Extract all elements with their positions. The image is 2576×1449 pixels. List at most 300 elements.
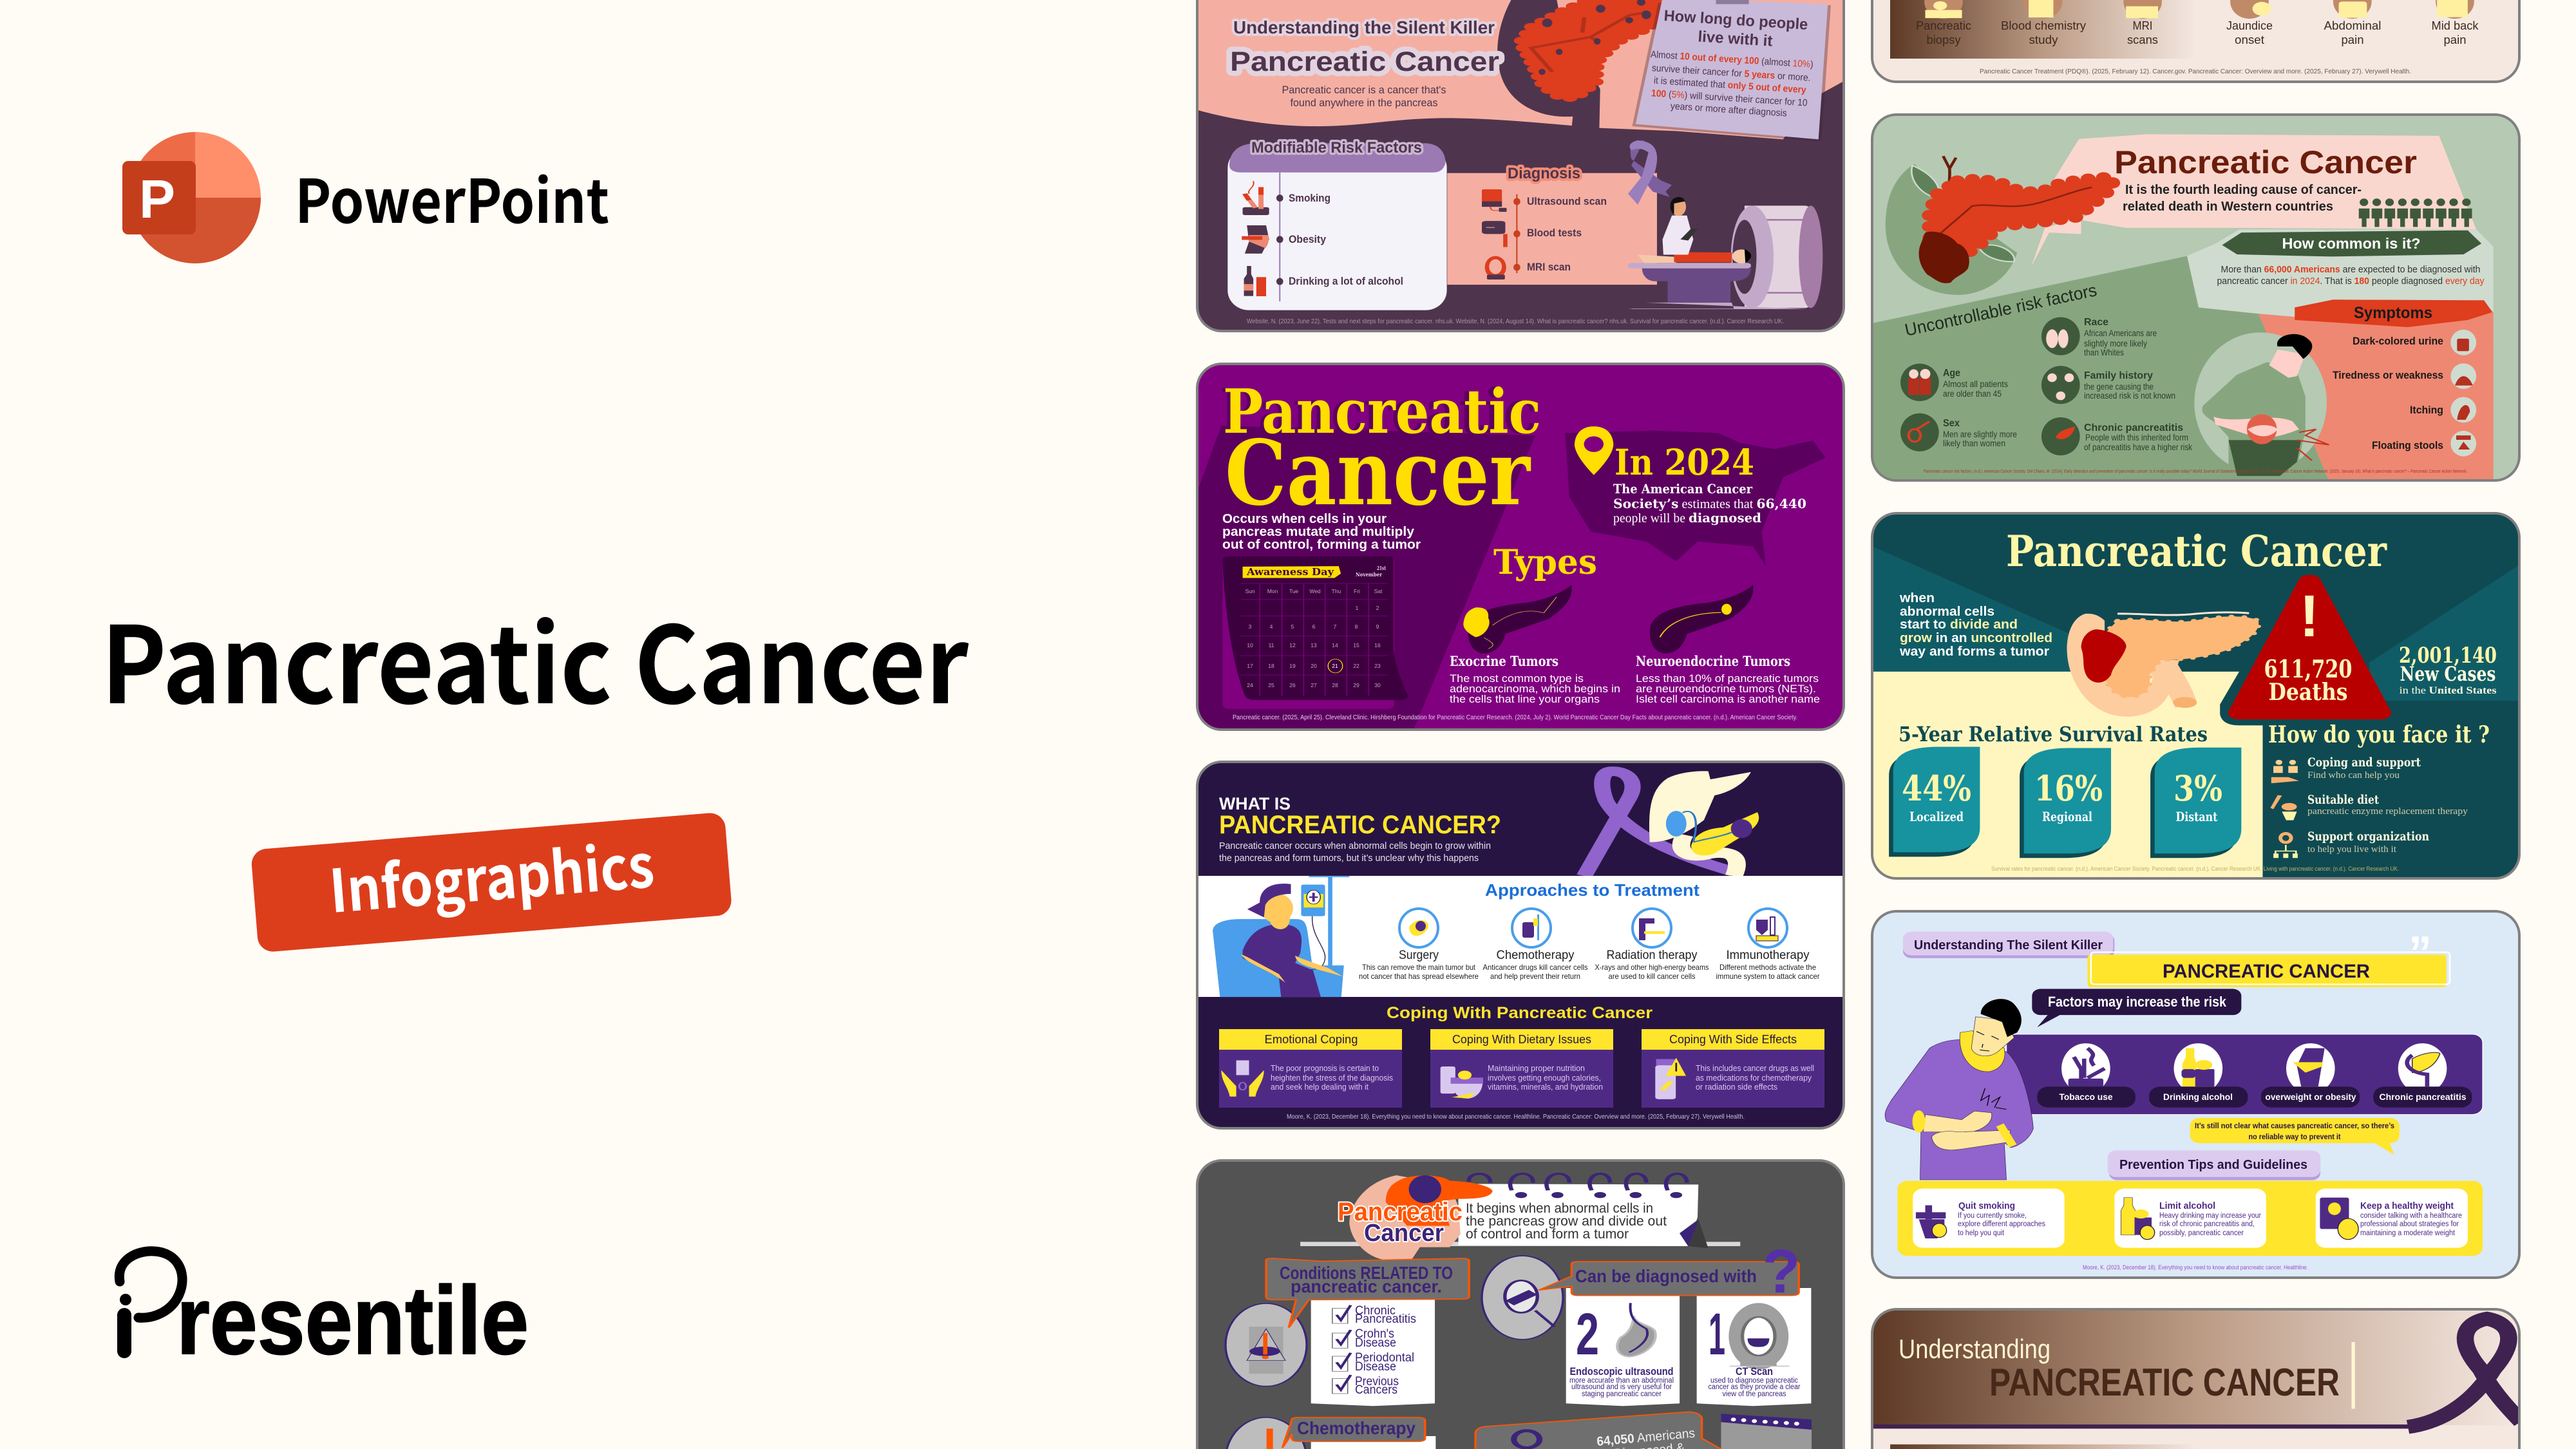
stat text: 66,440 diagnosed	[1613, 481, 1806, 526]
list: coping and support: Find who can help you	[2307, 770, 2400, 781]
intro text: the pancreas and form tumors, but it’s unclear why this happens	[1219, 853, 1479, 864]
panel background	[1872, 911, 2519, 1278]
calendar: awareness day: 23	[1374, 663, 1381, 669]
list: symptoms	[2333, 336, 2443, 451]
treatment: surgery	[1359, 949, 1479, 981]
risk: chronic pancreatitis: People with this inherited form	[2085, 433, 2188, 442]
stat: deaths	[2264, 654, 2352, 706]
treatment: surgery: Surgery	[1399, 949, 1439, 962]
treatment: radiation therapy	[1595, 949, 1709, 981]
text: neuroendocrine tumors	[1636, 653, 1820, 705]
calendar: awareness day: 10	[1247, 642, 1253, 649]
stat card: localized: 44%	[1902, 768, 1971, 809]
tip: quit smoking	[1958, 1200, 2045, 1237]
panel background	[1197, 1160, 1844, 1449]
treatment: immunotherapy: Different methods activate the	[1719, 963, 1816, 972]
list: coping and support	[2307, 755, 2421, 781]
calendar: awareness day: 17	[1247, 663, 1253, 669]
description text: of control and form a tumor	[1466, 1227, 1629, 1242]
shapes: banners, bands and cards	[1885, 932, 2483, 1256]
icon: ultrasound	[1482, 189, 1506, 212]
card: side effects	[1642, 1029, 1824, 1108]
stat card: distant	[2174, 768, 2222, 824]
labels: diagnostic tests: MRI	[2133, 19, 2152, 32]
stat: endoscopic ultrasound: more accurate than an abdominal	[1569, 1377, 1674, 1385]
calendar: awareness day: 15	[1353, 642, 1359, 649]
note: how long do people live with it: How long do people	[1663, 7, 1808, 33]
illustration: notebook, pancreas, scans and papers	[1226, 1174, 1812, 1449]
labels: symptoms: Jaundice	[2226, 19, 2273, 32]
card: emotional coping: Emotional Coping	[1265, 1033, 1358, 1046]
card: side effects: or radiation side effects	[1696, 1082, 1777, 1092]
icon: PowerPoint logo: P	[139, 169, 175, 229]
heading: pancreatic cancer: Pancreatic Cancer	[2114, 144, 2417, 180]
icon: treatment circles	[1399, 909, 1787, 947]
calendar: awareness day	[1222, 556, 1408, 700]
calendar: awareness day: 5	[1291, 623, 1294, 630]
heading: uncontrollable risk factors: Uncontrollable risk factors	[1903, 280, 2099, 340]
tip: healthy weight: Keep a healthy weight	[2360, 1200, 2454, 1211]
heading: coping: Coping With Pancreatic Cancer	[1387, 1004, 1653, 1022]
calendar: awareness day: 25	[1268, 682, 1274, 688]
risk: chronic pancreatitis	[2084, 422, 2192, 452]
risk: age	[1943, 368, 2008, 399]
icons: coping, diet and support	[2270, 760, 2299, 858]
heading: understanding: Understanding	[1899, 1334, 2050, 1364]
stat text: 66,440 diagnosed: people will be diagnosed	[1613, 510, 1761, 526]
illustration: neuroendocrine tumor pancreas	[1650, 585, 1754, 654]
stat card: regional	[2034, 768, 2103, 824]
callout: factors may increase the risk: Factors may increase the risk	[2048, 994, 2227, 1010]
citation: Pancreatic Cancer Treatment (PDQ®). (2025, February 12). Cancer.gov. Pancreatic Cancer: Overview and more. (2025, February 27). Verywell Health.	[1980, 68, 2411, 75]
stat card: distant: 3%	[2174, 768, 2222, 809]
stat: in 2024: In 2024	[1615, 441, 1754, 483]
tip: healthy weight: consider talking with a healthcare	[2360, 1212, 2462, 1220]
panel: silent killer prevention	[1872, 911, 2519, 1278]
description text: the pancreas grow and divide out	[1466, 1214, 1667, 1229]
calendar: awareness day: 24	[1247, 682, 1253, 688]
tip: healthy weight	[2360, 1200, 2462, 1237]
treatment: immunotherapy: Immunotherapy	[1726, 949, 1810, 962]
badge: Infographics	[251, 812, 732, 952]
calendar: awareness day: 7	[1334, 623, 1337, 630]
gradient header	[1872, 1309, 2519, 1425]
heading: pancreatic: Pancreatic	[1220, 376, 1536, 448]
intro text	[1282, 84, 1446, 109]
panel background	[1198, 82, 1842, 330]
risk: chronic pancreatitis: Chronic pancreatitis	[2084, 422, 2183, 433]
icon: exclamation mark: !	[2300, 583, 2319, 649]
heading: conditions related: Conditions RELATED TO	[1280, 1263, 1453, 1283]
gradient diagnosis strip	[1890, 0, 2197, 59]
title: Pancreatic Cancer	[101, 580, 969, 734]
PowerPoint wordmark: PowerPoint	[295, 153, 609, 240]
risk: race: than Whites	[2084, 348, 2124, 357]
stat card: localized	[1902, 768, 1971, 824]
background shapes and pancreas illustration	[1873, 134, 2494, 480]
risk: sex: Men are slightly more	[1943, 430, 2017, 439]
calendar: awareness day: Mon	[1267, 588, 1278, 594]
text: exocrine tumors: Exocrine Tumors	[1450, 653, 1558, 669]
stat card: distant: Distant	[2175, 809, 2218, 824]
heading: cancer: Cancer	[1225, 420, 1531, 526]
fact: fourth leading cause: It is the fourth leading cause of cancer-	[2125, 183, 2362, 197]
card: emotional coping: The poor prognosis is certain to	[1271, 1063, 1379, 1073]
stat text: how common	[2217, 264, 2485, 287]
tip: healthy weight: professional about strategies for	[2360, 1220, 2459, 1228]
calendar: awareness day: 28	[1332, 682, 1338, 688]
risk: age: are older than 45	[1943, 389, 2002, 399]
icon: PowerPoint logo	[122, 132, 261, 263]
icon: obesity	[1242, 225, 1269, 254]
treatment: chemotherapy	[1482, 949, 1588, 981]
tip: limit alcohol: possibly, pancreatic cancer	[2159, 1229, 2244, 1237]
definition text	[1899, 591, 2052, 659]
stat card: localized: Localized	[1909, 809, 1964, 824]
calendar: awareness day: 30	[1374, 682, 1381, 688]
calendar: awareness day: 21st	[1377, 565, 1386, 571]
diagnosis labels: Blood tests	[1527, 227, 1582, 239]
callout: no reliable way to prevent	[2195, 1121, 2394, 1141]
calendar: awareness day: 21	[1332, 663, 1338, 669]
treatment: immunotherapy: immune system to attack cancer	[1716, 972, 1820, 981]
note: how long do people live with it: Almost 10 out of every 100 (almost 10%)	[1650, 49, 1814, 70]
stat: new cases: 2,001,140	[2399, 643, 2497, 668]
treatment: radiation therapy: X-rays and other high-energy beams	[1595, 963, 1709, 972]
note: how long do people live with it	[1650, 7, 1814, 119]
stat: new cases: in the United States	[2400, 685, 2496, 696]
calendar: awareness day: 3	[1249, 623, 1252, 630]
risk: family history	[2084, 370, 2175, 401]
risk labels: Drinking a lot of alcohol	[1289, 275, 1403, 287]
stat: endoscopic ultrasound: ultrasound and is very useful for	[1571, 1383, 1672, 1391]
checklist: related conditions: Crohn's	[1355, 1327, 1394, 1341]
stat: endoscopic ultrasound: staging pancreatic cancer	[1582, 1390, 1662, 1398]
diagnosis labels: MRI scan	[1527, 261, 1571, 273]
list: support organization: Support organization	[2307, 829, 2429, 844]
labels: symptoms: pain	[2342, 33, 2363, 46]
stat: deaths: 611,720	[2264, 654, 2352, 683]
intro text: found anywhere in the pancreas	[1291, 97, 1437, 109]
checklist: related conditions: Chronic	[1355, 1304, 1396, 1318]
tip: limit alcohol: risk of chronic pancreatitis and,	[2159, 1220, 2255, 1228]
labels: diagnostic tests: Pancreatic	[1916, 19, 1971, 32]
panel: conditions and diagnosis	[1197, 1160, 1844, 1449]
calendar: awareness day: 27	[1311, 682, 1317, 688]
tip: limit alcohol	[2159, 1200, 2261, 1237]
icon: quotation mark: ”	[2409, 927, 2432, 979]
intro text: Pancreatic cancer is a cancer that's	[1282, 84, 1446, 96]
calendar: awareness day: 6	[1312, 623, 1316, 630]
checklist: related conditions: Cancers	[1355, 1383, 1397, 1397]
citation: Moore, K. (2023, December 18). Everything you need to know about pancreatic cancer. Healthline.	[2083, 1264, 2308, 1271]
heading: pancreatic cancer: PANCREATIC CANCER	[2163, 961, 2370, 982]
text: exocrine tumors: adenocarcinoma, which begins in	[1450, 683, 1620, 695]
card: dietary issues: involves getting enough calories,	[1488, 1073, 1601, 1083]
calendar: awareness day: 22	[1353, 663, 1359, 669]
note: how long do people live with it: survive their cancer for 5 years or more.	[1651, 62, 1811, 84]
treatment: chemotherapy: Chemotherapy	[1497, 949, 1575, 962]
risk labels	[1289, 192, 1403, 287]
card: side effects: as medications for chemotherapy	[1696, 1073, 1812, 1083]
callout: no reliable way to prevent: no reliable way to prevent it	[2249, 1132, 2340, 1141]
heading: how do you face it: How do you face it ?	[2268, 721, 2490, 748]
note: how long do people live with it: live with it	[1698, 28, 1773, 50]
stat card: regional: 16%	[2034, 768, 2103, 809]
description text: It begins when abnormal cells in	[1466, 1201, 1653, 1216]
icon: alcohol	[1244, 266, 1266, 296]
section: approaches to treatment	[1197, 876, 1844, 997]
calendar: awareness day: 19	[1289, 663, 1296, 669]
card: side effects: Coping With Side Effects	[1669, 1033, 1797, 1046]
checklist: related conditions: Pancreatitis	[1355, 1312, 1416, 1326]
definition text: grow in an uncontrolled	[1900, 631, 2052, 645]
stat: CT scan: 1	[1709, 1302, 1725, 1367]
calendar: awareness day: 20	[1311, 663, 1317, 669]
stat: endoscopic ultrasound: 2	[1576, 1302, 1599, 1367]
heading: pancreatic cancer: PANCREATIC CANCER	[1989, 1361, 2340, 1404]
labels: symptoms: Abdominal	[2324, 19, 2382, 32]
heading: what is: WHAT IS	[1219, 794, 1291, 813]
diagnosis labels	[1527, 195, 1607, 273]
list: symptoms: Dark-colored urine	[2353, 336, 2443, 347]
card: dietary issues	[1430, 1029, 1613, 1108]
text: exocrine tumors	[1450, 653, 1620, 705]
citation: Website, N. (2023, June 22). Tests and next steps for pancreatic cancer. nhs.uk. Website, N. (2024, August 14). What is pancreatic cancer? nhs.uk. Survival for pancreatic cancer. (n.d.). Cancer Research UK.	[1247, 317, 1784, 325]
card: emotional coping: heighten the stress of the diagnosis	[1271, 1073, 1393, 1083]
stat text: how common: pancreatic cancer in 2024. That is 180 people diagnosed every day	[2217, 276, 2485, 287]
stat: CT scan: CT Scan	[1736, 1365, 1773, 1378]
text: exocrine tumors: The most common type is	[1450, 672, 1584, 685]
icon: smoking	[1243, 181, 1269, 215]
heading: modifiable risk factors: Modifiable Risk Factors	[1251, 139, 1422, 156]
calendar: awareness day: 13	[1311, 642, 1317, 649]
list: support organization	[2307, 829, 2429, 855]
definition text: Occurs when cells in your	[1222, 512, 1387, 526]
labels: symptoms: onset	[2235, 33, 2264, 46]
calendar: awareness day: 29	[1353, 682, 1359, 688]
illustration: exocrine tumor pancreas	[1463, 585, 1572, 654]
heading: pancreatic cancer: Pancreatic Cancer	[1230, 46, 1499, 77]
risk: race: Race	[2084, 317, 2108, 328]
panel background	[1872, 115, 2519, 480]
risk factor labels: Chronic pancreatitis	[2379, 1092, 2467, 1102]
citation: Pancreatic cancer. (2025, April 25). Cleveland Clinic. Hirshberg Foundation for Pancreatic Cancer Research. (2024, July 2). World Pancreatic Cancer Day Facts about pancreatic cancer. (n.d.). American Cancer Society.	[1233, 714, 1797, 721]
calendar: awareness day: Sat	[1374, 588, 1383, 594]
calendar: awareness day: Tue	[1289, 588, 1298, 594]
card: emotional coping	[1219, 1029, 1402, 1108]
text: neuroendocrine tumors: Neuroendocrine Tumors	[1636, 653, 1790, 669]
list: symptoms: Floating stools	[2372, 440, 2443, 451]
risk factor labels: overweight or obesity	[2266, 1092, 2356, 1102]
panel background	[1872, 1309, 2519, 1449]
definition text	[1222, 512, 1421, 552]
labels: symptoms	[2226, 19, 2479, 46]
heading: how common: How common is it?	[2282, 235, 2420, 252]
tip: quit smoking: explore different approaches	[1958, 1220, 2045, 1228]
Presentile logo	[119, 1251, 529, 1374]
labels: diagnostic tests: biopsy	[1927, 33, 1960, 46]
panel: treatment and symptoms fragment	[1872, 0, 2519, 82]
treatment: surgery: not cancer that has spread elsewhere	[1359, 972, 1479, 981]
heading: pancreatic: Pancreatic	[1338, 1198, 1463, 1226]
list: symptoms: Itching	[2410, 404, 2443, 416]
stat: new cases: New Cases	[2400, 663, 2496, 686]
card: modifiable risk factors	[1227, 139, 1447, 310]
definition text: start to divide and	[1900, 618, 2018, 632]
treatment: radiation therapy: are used to kill cancer cells	[1609, 972, 1695, 981]
checklist: related conditions: Previous	[1355, 1375, 1399, 1388]
intro text: Pancreatic cancer occurs when abnormal cells begin to grow within	[1219, 840, 1491, 851]
badge: Infographics: Infographics	[326, 819, 657, 930]
illustration: patient receiving chemotherapy	[1213, 876, 1349, 997]
treatment: immunotherapy	[1716, 949, 1820, 981]
citation: Moore, K. (2023, December 18). Everything you need to know about pancreatic cancer. Healthline. Pancreatic Cancer: Overview and more. (2025, February 27). Verywell Health.	[1287, 1113, 1745, 1121]
labels: diagnostic tests: scans	[2127, 33, 2158, 46]
risk: family history: increased risk is not known	[2084, 391, 2175, 401]
header divider, ribbon and lower strip	[1873, 1319, 2521, 1449]
panel: understanding pancreatic cancer	[1872, 1309, 2521, 1449]
icons: diagnosis and symptom markers	[1924, 0, 2474, 19]
risk: sex: likely than women	[1943, 439, 2005, 448]
treatment: surgery: This can remove the main tumor but	[1362, 963, 1476, 972]
heading: conditions related: pancreatic cancer.	[1291, 1276, 1442, 1296]
note: how long do people live with it: 100 (5%) will survive their cancer for 10	[1651, 88, 1808, 109]
panel: purple awareness infographic	[1197, 364, 1844, 730]
heading: prevention tips: Prevention Tips and Guidelines	[2119, 1158, 2307, 1172]
callout: no reliable way to prevent: It’s still not clear what causes pancreatic cancer, so there’s	[2195, 1121, 2394, 1130]
stat: deaths: Deaths	[2268, 679, 2348, 706]
card: dietary issues: Coping With Dietary Issues	[1452, 1033, 1591, 1046]
stat text: 66,440 diagnosed: Society’s estimates that 66,440	[1613, 496, 1806, 511]
heading: conditions related	[1280, 1263, 1453, 1296]
risk: race: African Americans are	[2084, 328, 2157, 338]
risk: age: Almost all patients	[1943, 379, 2008, 389]
heading: diagnosis: Diagnosis	[1508, 165, 1580, 182]
risk: sex	[1943, 418, 2017, 448]
stat card: regional: Regional	[2042, 809, 2092, 824]
tip: quit smoking: Quit smoking	[1958, 1200, 2015, 1211]
calendar: awareness day: Thu	[1332, 588, 1341, 594]
heading: pancreatic cancer: Pancreatic Cancer	[2006, 526, 2387, 576]
checklist: related conditions: Periodontal	[1355, 1351, 1414, 1365]
list: coping and support: Coping and support	[2307, 755, 2421, 770]
icon: medicine warning	[1655, 1058, 1686, 1099]
icon: caring hands	[1221, 1060, 1264, 1097]
heading: understanding the silent killer: Understanding the Silent Killer	[1233, 17, 1495, 37]
risk: race	[2084, 317, 2157, 357]
heading: approaches to treatment: Approaches to Treatment	[1485, 880, 1700, 900]
tip: healthy weight: maintaining a moderate weight	[2360, 1229, 2456, 1237]
calendar: awareness day: Wed	[1309, 588, 1321, 594]
text: exocrine tumors: the cells that line your organs	[1450, 693, 1600, 705]
checklist: related conditions: Disease	[1355, 1360, 1396, 1374]
icon: MRI	[1485, 256, 1506, 279]
calendar: awareness day: 12	[1289, 642, 1296, 649]
heading: chemotherapy: Chemotherapy	[1297, 1418, 1416, 1438]
risk factor labels: Drinking alcohol	[2163, 1092, 2233, 1102]
stat text: 66,440 diagnosed: The American Cancer	[1613, 481, 1752, 497]
text: neuroendocrine tumors: are neuroendocrine tumors (NETs).	[1636, 683, 1816, 695]
list: suitable diet: pancreatic enzyme replacement therapy	[2307, 806, 2468, 817]
treatment: chemotherapy: Anticancer drugs kill cancer cells	[1482, 963, 1588, 972]
illustration: ribbon and organs	[1584, 771, 1759, 876]
card: emotional coping: and seek help dealing with it	[1271, 1082, 1368, 1092]
risk factor labels: Tobacco use	[2060, 1092, 2113, 1102]
panel background	[1197, 762, 1844, 1128]
stat: 64,050 Americans: 64,050 Americans	[1596, 1426, 1696, 1449]
list: suitable diet: Suitable diet	[2307, 793, 2379, 807]
list: suitable diet	[2307, 793, 2468, 817]
icon: bottle and food bowl	[1441, 1066, 1483, 1099]
citation: Survival rates for pancreatic cancer. (n.d.). American Cancer Society. Pancreatic cancer. (n.d.). Cancer Research UK. Living with pancreatic cancer. (n.d.). Cancer Research UK.	[1991, 866, 2399, 873]
stat: CT scan	[1708, 1302, 1801, 1398]
calendar: awareness day: 11	[1269, 642, 1274, 649]
text: neuroendocrine tumors: Islet cell carcinoma is another name	[1636, 693, 1820, 705]
background wedge and US map	[1197, 426, 1826, 730]
heading: survival rates: 5-Year Relative Survival Rates	[1899, 722, 2208, 746]
calendar: awareness day: 9	[1376, 623, 1379, 630]
checklist: related conditions	[1355, 1304, 1416, 1397]
panel background	[1197, 364, 1844, 730]
icon: blood test	[1482, 221, 1508, 247]
calendar: awareness day: 16	[1374, 642, 1381, 649]
card: dietary issues: Maintaining proper nutrition	[1488, 1063, 1585, 1073]
background shapes, pancreas and warning triangle	[1873, 547, 2519, 880]
stat: CT scan: view of the pancreas	[1722, 1390, 1786, 1398]
heading: cancer: Cancer	[1364, 1220, 1444, 1247]
illustration: header shapes, pancreas and note	[1197, 0, 1845, 142]
citation: Pancreatic cancer risk factors. (n.d.). American Cancer Society. Del Chiaro, M. (2014). Early detection and prevention of pancreatic cancer: Is it really possible today? World Journal of Gastroenterology, 2014, 12118. Pancreatic Cancer Action Network. (2025, January 16). What is pancreatic cancer? – Pancreatic Cancer Action Network.	[1924, 469, 2467, 474]
calendar: awareness day: November	[1356, 571, 1383, 578]
risk: chronic pancreatitis: of pancreatitis have a higher risk	[2084, 442, 2192, 452]
calendar: awareness day: 18	[1268, 663, 1274, 669]
calendar: awareness day: Sun	[1245, 588, 1255, 594]
labels: symptoms: pain	[2443, 33, 2467, 46]
tag: understanding the silent killer: Understanding The Silent Killer	[1914, 938, 2103, 952]
labels: diagnostic tests: study	[2029, 33, 2058, 46]
panel background	[1872, 513, 2519, 878]
heading: types: Types	[1493, 543, 1597, 582]
stat: endoscopic ultrasound: Endoscopic ultrasound	[1570, 1365, 1673, 1378]
stat: endoscopic ultrasound	[1569, 1302, 1674, 1398]
card: dietary issues: vitamins, minerals, and hydration	[1488, 1082, 1603, 1092]
stat: CT scan: used to diagnose pancreatic	[1710, 1377, 1798, 1385]
definition text: way and forms a tumor	[1899, 645, 2049, 659]
description text	[1466, 1201, 1667, 1242]
risk labels: Smoking	[1289, 192, 1331, 204]
panel: what is pancreatic cancer	[1197, 762, 1844, 1128]
risk: sex: Sex	[1943, 418, 1960, 429]
labels: diagnostic tests	[1916, 19, 2158, 46]
heading: pancreatic: Pancreatic	[1223, 376, 1541, 448]
fact: fourth leading cause	[2123, 183, 2362, 214]
calendar: awareness day: Awareness Day	[1246, 566, 1334, 578]
panel: teal deaths and survival	[1872, 513, 2519, 880]
labels: symptoms: Mid back	[2432, 19, 2479, 32]
tip: quit smoking: If you currently smoke,	[1958, 1212, 2027, 1220]
illustration: ribbon, doctor and MRI machine	[1628, 140, 1823, 309]
card: side effects: This includes cancer drugs as well	[1696, 1063, 1814, 1073]
fact: fourth leading cause: related death in Western countries	[2123, 200, 2333, 214]
heading: pancreatic cancer: PANCREATIC CANCER?	[1219, 811, 1501, 839]
calendar: awareness day: Fri	[1354, 588, 1360, 594]
icon: question mark: ?	[1763, 1237, 1800, 1306]
definition text: out of control, forming a tumor	[1222, 538, 1421, 552]
labels: diagnostic tests: Blood chemistry	[2001, 19, 2086, 32]
section: diagnosis	[1447, 165, 1657, 285]
panel: sage risk factors and symptoms	[1872, 115, 2519, 480]
